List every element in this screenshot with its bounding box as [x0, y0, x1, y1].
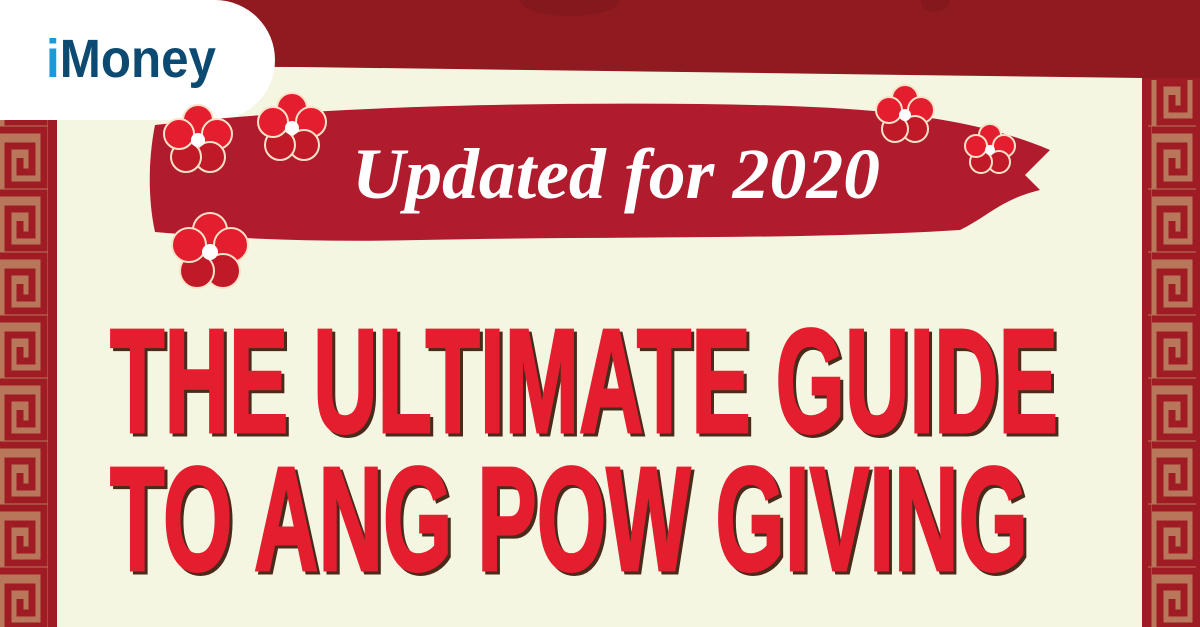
- title: [110, 299, 1061, 605]
- flowers: [164, 85, 1015, 288]
- brush stroke banner: [150, 104, 1050, 241]
- left meander border: [0, 118, 57, 627]
- top red band: [0, 0, 1200, 80]
- subtitle: Updated for 2020: Updated for 2020: [352, 134, 880, 214]
- right meander border: [1142, 78, 1200, 627]
- logo badge: [0, 0, 275, 120]
- logo badge: iMoney: [46, 29, 216, 89]
